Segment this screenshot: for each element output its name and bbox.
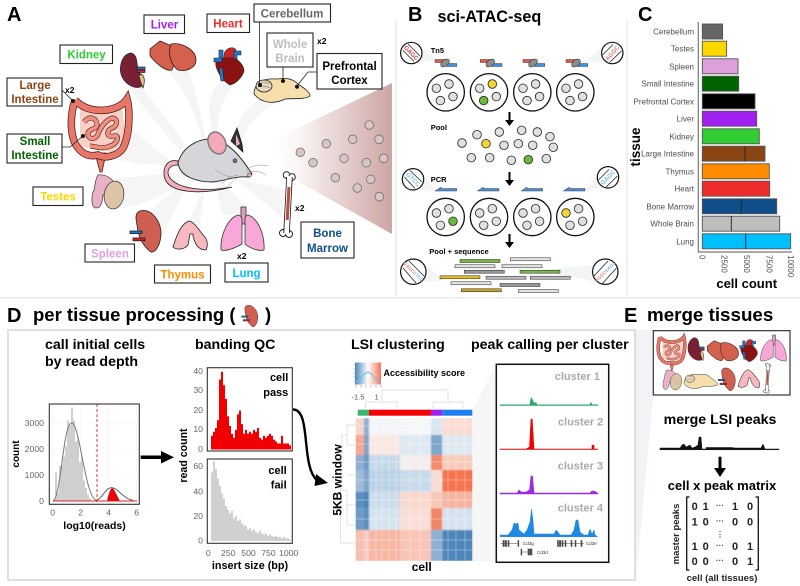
sequencing reads [440, 258, 570, 292]
label: x2 whole brain: x2 [317, 36, 327, 46]
icon: testes [92, 175, 126, 210]
arrow: to banding QC [141, 451, 174, 464]
heading: B: B [408, 4, 422, 26]
icon: spleen in title [242, 305, 258, 327]
chart: cell fail fragment histogram: 0 [198, 536, 203, 546]
icon: heart [214, 48, 244, 85]
matrix: 0 [692, 501, 698, 513]
leader lines to organ labels [62, 22, 317, 147]
x axis ticks [698, 255, 795, 278]
chart: read depth histogram: count [11, 440, 22, 468]
track: merged peaks [660, 437, 779, 450]
tissue labels: Cerebellum [653, 27, 694, 36]
magnifier: GTCC left: GTCC [404, 172, 421, 189]
label: Thymus: Thymus [160, 270, 205, 282]
panel: E merge tissues [624, 304, 790, 584]
tissue labels: Kidney [670, 132, 694, 141]
panel: C cell count bar chart [628, 4, 795, 291]
matrix: 1 [747, 556, 753, 568]
subheading: peak calling per cluster: peak calling per cluster [471, 337, 629, 353]
subheading: LSI clustering: LSI clustering [351, 337, 445, 353]
fans from mouse to organs [118, 68, 285, 250]
x axis ticks: 10000 [786, 255, 795, 278]
arrow: to pool [505, 112, 514, 126]
legend: accessibility score: Accessibility score [384, 368, 465, 378]
heading: E: E [624, 305, 637, 327]
track: cluster 2: cluster 2 [558, 417, 603, 429]
label: Bone Marrow [301, 222, 354, 258]
label: Small Intestine [7, 134, 62, 163]
label: Small Intestine: Small [20, 136, 50, 148]
chart: cell pass fragment histogram: 30 [193, 385, 203, 395]
matrix [687, 497, 758, 570]
matrix: 1 [692, 541, 698, 553]
axis title: master peaks: master peaks [671, 504, 682, 564]
chart: cell fail fragment histogram: 0 [206, 548, 211, 558]
gene labels: Cd3d [537, 550, 548, 555]
magnifier: combined barcode left: GAGCGTCC [402, 261, 425, 283]
chart: cell fail fragment histogram: 750 [261, 548, 276, 558]
matrix: 1 [747, 541, 753, 553]
tissue labels: Large Intestine [641, 150, 695, 159]
pooled cells [458, 126, 558, 165]
icon: thymus [173, 221, 207, 250]
label: x2 lung: x2 [237, 251, 247, 261]
title: sci-ATAC-seq: sci-ATAC-seq [438, 8, 541, 26]
subheading: call initial cells: by read depth [45, 354, 138, 370]
chart: read depth histogram [11, 404, 139, 532]
label: x2 bone marrow: x2 [295, 203, 305, 213]
track: cluster 4: cluster 4 [558, 503, 604, 515]
chart: cell fail fragment histogram: insert size (bp) [212, 560, 288, 572]
icon: intestines [71, 99, 129, 172]
curved arrow: to clustering [293, 410, 328, 486]
chart: cell pass fragment histogram: 20 [193, 405, 203, 415]
panel frame [8, 330, 635, 580]
panel: cluster peak tracks [496, 364, 609, 562]
tissue labels: Prefrontal Cortex [634, 97, 694, 106]
chart: read depth histogram: log10(reads) [63, 520, 126, 532]
legend: accessibility score [352, 362, 465, 402]
chart: read depth histogram: 3000 [25, 418, 44, 428]
axis title: cell (all tissues): cell (all tissues) [687, 573, 757, 584]
chart: read depth histogram: 4 [106, 508, 111, 518]
magnifier: AGGC top right [602, 42, 623, 64]
chart: cell fail fragment histogram: 40 [193, 486, 203, 496]
icon: lung [221, 207, 264, 250]
matrix: 0 [703, 556, 709, 568]
magnifier fans [408, 45, 612, 283]
cone of cells from bone marrow [273, 83, 392, 234]
matrix: 0 [732, 516, 738, 528]
magnifier: GAGC top left [401, 42, 422, 64]
label: Whole Brain: Whole [273, 39, 307, 51]
tissue labels: Small Intestine [642, 80, 695, 89]
track: cluster 4 [500, 503, 604, 537]
label: Lung: Lung [232, 268, 261, 280]
track: cluster 2 [500, 417, 603, 450]
title closing bracket: ) [265, 304, 271, 325]
chart: read depth histogram: 0 [50, 508, 55, 518]
matrix: 0 [703, 516, 709, 528]
magnifier: GTCC left [402, 169, 424, 190]
wells row 2 [427, 198, 594, 236]
subheading: cell x peak matrix: cell x peak matrix [668, 478, 777, 493]
label: Large Intestine [7, 78, 62, 106]
heading: D: D [7, 305, 21, 327]
magnifier: AGGC top right: AGGC [605, 44, 622, 62]
chart: cell pass fragment histogram: cell [270, 372, 288, 384]
icon: spleen [130, 210, 161, 252]
matrix: 0 [747, 501, 753, 513]
chart: cell pass fragment histogram: 40 [193, 366, 203, 376]
matrix: ··· [716, 541, 724, 550]
subheading: call initial cells: call initial cells [45, 337, 145, 353]
chart: cell fail fragment histogram [193, 459, 299, 572]
magnifier: GAGC top left: GAGC [402, 45, 420, 63]
axis title: 5KB window: 5KB window [330, 444, 344, 516]
subheading: merge LSI peaks: merge LSI peaks [664, 412, 776, 428]
x axis ticks: 2500 [720, 255, 728, 273]
magnifier: GAGC right [597, 167, 619, 188]
label: Testes: Testes [40, 192, 76, 204]
gene labels: Cd3e [586, 541, 597, 546]
matrix: ··· [716, 501, 724, 510]
matrix: 0 [732, 541, 738, 553]
chart: read depth histogram: 2000 [25, 444, 44, 454]
legend: accessibility score: 1 [374, 392, 379, 402]
arrow: to sequencing [505, 234, 514, 248]
chart: read depth histogram: 2 [78, 508, 83, 518]
label: x2 large intestine: x2 [65, 85, 75, 95]
axis title: read count: read count [178, 428, 190, 483]
label: Cerebellum [254, 4, 330, 22]
legend: accessibility score: -1.5 [352, 392, 364, 402]
chart: read depth histogram: 6 [134, 508, 139, 518]
matrix: 1 [703, 501, 709, 513]
heading: A: A [7, 4, 21, 26]
icon: mouse [164, 128, 268, 192]
label: Liver: Liver [151, 20, 179, 32]
Tn5 transposomes [435, 57, 588, 69]
gene models [500, 540, 584, 555]
panel: D per tissue processing [7, 304, 635, 580]
chart: cell fail fragment histogram: 20 [193, 511, 203, 521]
connector fan from panel D [636, 330, 653, 580]
axis title: tissue: tissue [628, 127, 643, 167]
matrix: 1 [732, 501, 738, 513]
chart: cell fail fragment histogram: 1000 [279, 548, 299, 558]
merged organ montage [653, 331, 790, 395]
label: Large Intestine: Intestine [11, 94, 59, 106]
label: Spleen: Spleen [91, 248, 129, 260]
tissue labels [634, 27, 695, 246]
matrix: ⋮ [716, 530, 724, 539]
matrix: 0 [692, 556, 698, 568]
wells row 1 [427, 74, 594, 111]
connector: heatmap to peak box [472, 364, 496, 562]
chart: cell pass fragment histogram: pass [263, 387, 288, 399]
label: Lung [225, 263, 268, 282]
matrix: 0 [703, 541, 709, 553]
dendrogram: top [366, 390, 463, 409]
label: Cerebellum: Cerebellum [261, 8, 323, 20]
label: Prefrontal Cortex [317, 54, 382, 89]
label: Prefrontal Cortex: Prefrontal [322, 61, 377, 73]
label: Whole Brain: Brain [275, 53, 305, 65]
step label: PCR: PCR [431, 175, 447, 184]
label: Prefrontal Cortex: Cortex [331, 75, 368, 87]
matrix: ··· [716, 516, 724, 526]
track: cluster 3: cluster 3 [558, 460, 603, 472]
label: Thymus [154, 265, 210, 283]
chart: cell fail fragment histogram: cell [268, 465, 287, 477]
title: merge tissues: merge tissues [647, 304, 773, 325]
label: Testes [33, 187, 83, 206]
label: Heart: Heart [213, 18, 243, 30]
label: Spleen [85, 244, 134, 262]
label: Kidney: Kidney [67, 50, 106, 62]
chart: cell fail fragment histogram: 500 [241, 548, 256, 558]
title: per tissue processing: per tissue processing ( [33, 304, 236, 325]
chart axes [698, 22, 792, 252]
label: Whole Brain [267, 33, 313, 67]
label: Bone Marrow: Bone [313, 228, 342, 240]
gene labels [523, 541, 597, 555]
step label: Pool + sequence: Pool + sequence [429, 247, 489, 256]
step label: Pool: Pool [431, 123, 447, 132]
subheading: banding QC: banding QC [195, 337, 275, 353]
icon: liver [150, 41, 196, 71]
label: Heart [207, 14, 250, 32]
icon: brain [254, 78, 310, 102]
heading: C: C [638, 4, 652, 26]
chart: cell pass fragment histogram: 10 [193, 424, 203, 434]
panel: A tissues [7, 4, 392, 283]
subheading: call initial cells [45, 337, 145, 370]
label: Small Intestine: Intestine [11, 150, 59, 162]
chart: cell fail fragment histogram: 60 [193, 461, 203, 471]
dividers between panels [0, 20, 800, 299]
panel: B sci-ATAC-seq [401, 4, 623, 292]
chart: cell fail fragment histogram: 250 [221, 548, 236, 558]
chart: cell fail fragment histogram: fail [271, 480, 287, 492]
tissue labels: Lung [676, 237, 694, 246]
label: Bone Marrow: Marrow [307, 243, 348, 255]
bar chart [702, 24, 791, 249]
tissue labels: Heart [674, 185, 695, 194]
arrow: to matrix [714, 457, 726, 477]
axis title: cell count: cell count [716, 276, 778, 291]
dendrogram: left [340, 425, 355, 543]
x axis ticks: 0 [698, 255, 706, 260]
icon: kidney [120, 53, 145, 88]
magnifier: combined barcode right: AGGCGAGC [594, 260, 617, 283]
axis title: cell: cell [412, 560, 432, 574]
chart: read depth histogram: 0 [39, 496, 44, 506]
tissue labels: Whole Brain [650, 220, 694, 229]
tissue labels: Bone Marrow [646, 202, 694, 211]
matrix: 0 [732, 556, 738, 568]
tissue labels: Liver [677, 115, 694, 124]
x axis ticks: 5000 [742, 255, 751, 273]
magnifier: GAGC right: GAGC [600, 169, 618, 186]
heatmap [356, 418, 472, 561]
label: Large Intestine: Large [19, 80, 51, 92]
matrix: 1 [692, 516, 698, 528]
matrix: ··· [716, 556, 724, 565]
track: cluster 1 [500, 371, 600, 406]
matrix: 0 [747, 516, 753, 528]
label: Liver [144, 15, 184, 34]
tissue labels: Spleen [669, 62, 694, 71]
chart: cell pass fragment histogram: 0 [198, 444, 203, 454]
x axis ticks: 7500 [764, 255, 774, 273]
track: cluster 1: cluster 1 [555, 371, 600, 383]
tissue labels: Testes [671, 45, 694, 54]
cluster colour bar [358, 410, 472, 416]
gene labels: Cd3g [523, 541, 534, 546]
chart: cell pass fragment histogram [193, 366, 292, 454]
chart: read depth histogram: 1000 [25, 470, 44, 480]
tissue labels: Thymus [666, 167, 694, 176]
PCR primers [435, 187, 585, 191]
step label: Tn5: Tn5 [431, 46, 444, 55]
label: Kidney [60, 45, 112, 64]
arrow: to PCR [505, 172, 514, 186]
track: cluster 3 [500, 460, 603, 494]
icon: bone [280, 172, 295, 238]
